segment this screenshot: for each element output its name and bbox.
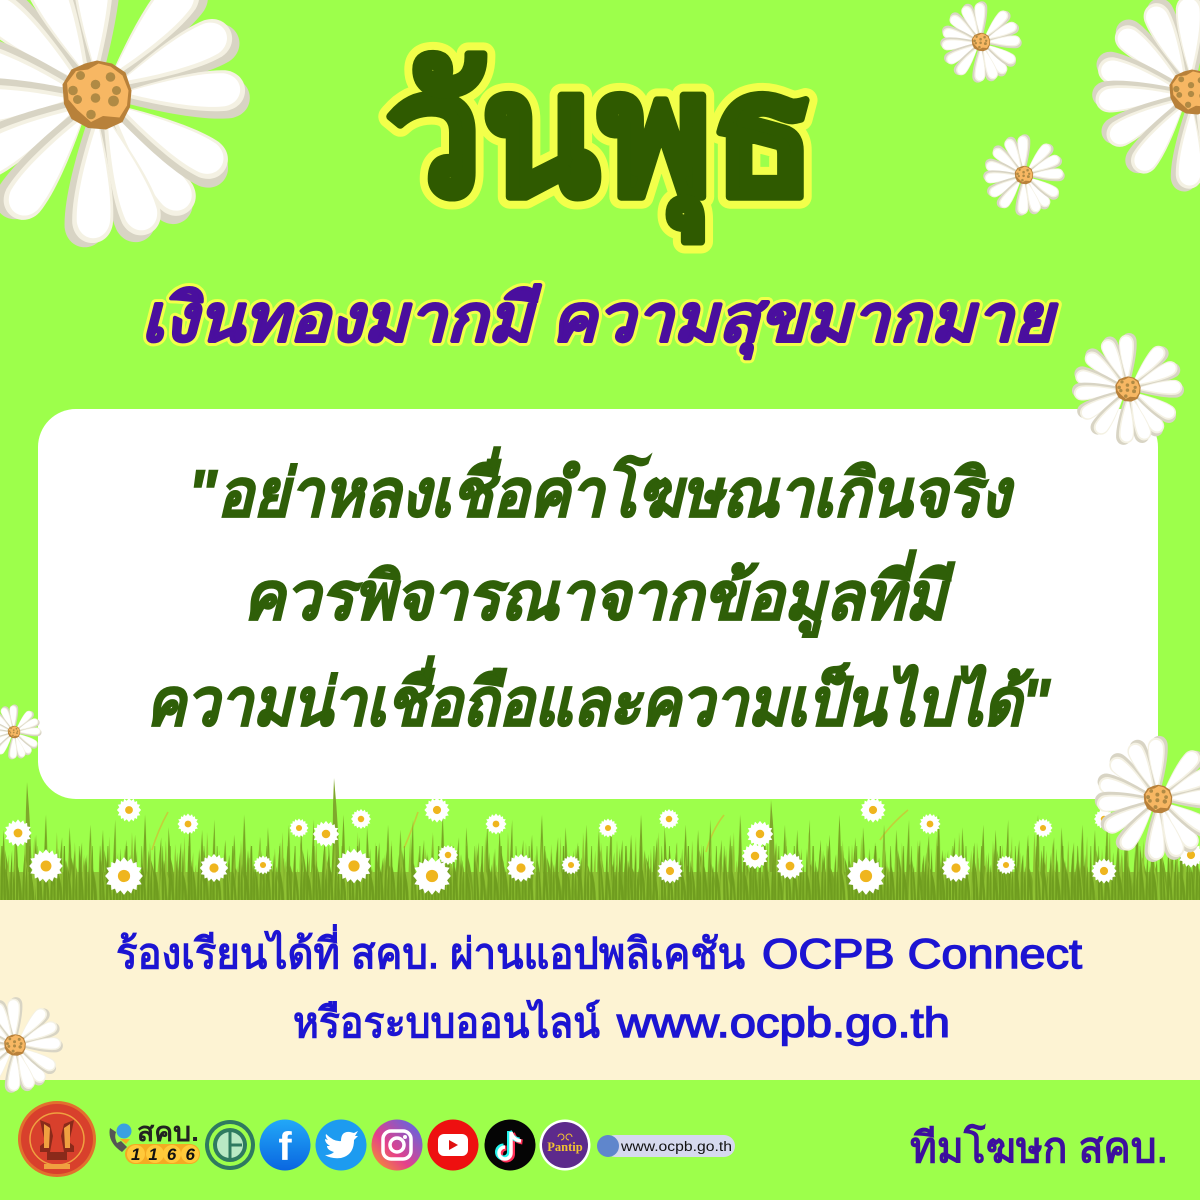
flower: right overlapping panel	[1071, 333, 1184, 445]
panel: quote	[38, 409, 1158, 799]
quote line 3: ความน่าเชื่อถือและความเป็นไปได้"	[146, 656, 1051, 739]
complaint line 2: หรือระบบออนไลน์	[293, 999, 600, 1046]
website badge	[597, 1135, 735, 1157]
subtitle: เงินทองมากมี ความสุขมากมาย	[141, 281, 1058, 360]
complaint line 1: OCPB Connect	[762, 930, 1082, 977]
flower: large top left	[0, 0, 251, 248]
quote line 1: "อย่าหลงเชื่อคำโฆษณาเกินจริง	[188, 447, 1014, 530]
band: complaint information	[0, 900, 1200, 1080]
flower: top right large	[1091, 0, 1200, 192]
icon: facebook: f	[278, 1125, 292, 1169]
icon: twitter	[316, 1120, 366, 1170]
complaint line 1	[116, 925, 1082, 977]
icon: pantip	[540, 1120, 590, 1170]
team credit: ทีมโฆษก สคบ.	[910, 1123, 1168, 1171]
icon: youtube	[428, 1120, 478, 1170]
complaint line 2	[293, 999, 950, 1046]
complaint line 1: ร้องเรียนได้ที่ สคบ. ผ่านแอปพลิเคชัน	[116, 925, 745, 977]
complaint line 2: www.ocpb.go.th	[616, 999, 950, 1046]
icon: facebook	[260, 1120, 310, 1170]
icon: instagram	[372, 1120, 422, 1170]
website badge: www.ocpb.go.th	[620, 1139, 732, 1154]
flower: lower right	[1094, 736, 1200, 862]
icon: pantip: Pantip	[547, 1140, 583, 1154]
meadow: grass and daisies	[0, 778, 1200, 900]
flower: top right small	[940, 1, 1022, 83]
icon: hotline 1166	[110, 1117, 200, 1164]
flower: lower left	[0, 997, 63, 1093]
icon: OCPB seal	[18, 1101, 96, 1177]
quote line 2: ควรพิจารณาจากข้อมูลที่มี	[243, 550, 955, 638]
icon: hotline 1166: สคบ.	[137, 1117, 199, 1147]
icon: OCPB logo	[205, 1120, 255, 1170]
title: วันพุธ	[386, 39, 816, 242]
flower: left edge	[0, 704, 42, 760]
flower: right small	[983, 134, 1065, 216]
icon: tiktok	[484, 1120, 536, 1170]
icon: hotline 1166: 1166	[131, 1145, 196, 1164]
subtitle: เงินทองมากมี ความสุขมากมาย	[141, 281, 1058, 360]
title: วันพุธ	[386, 39, 816, 242]
